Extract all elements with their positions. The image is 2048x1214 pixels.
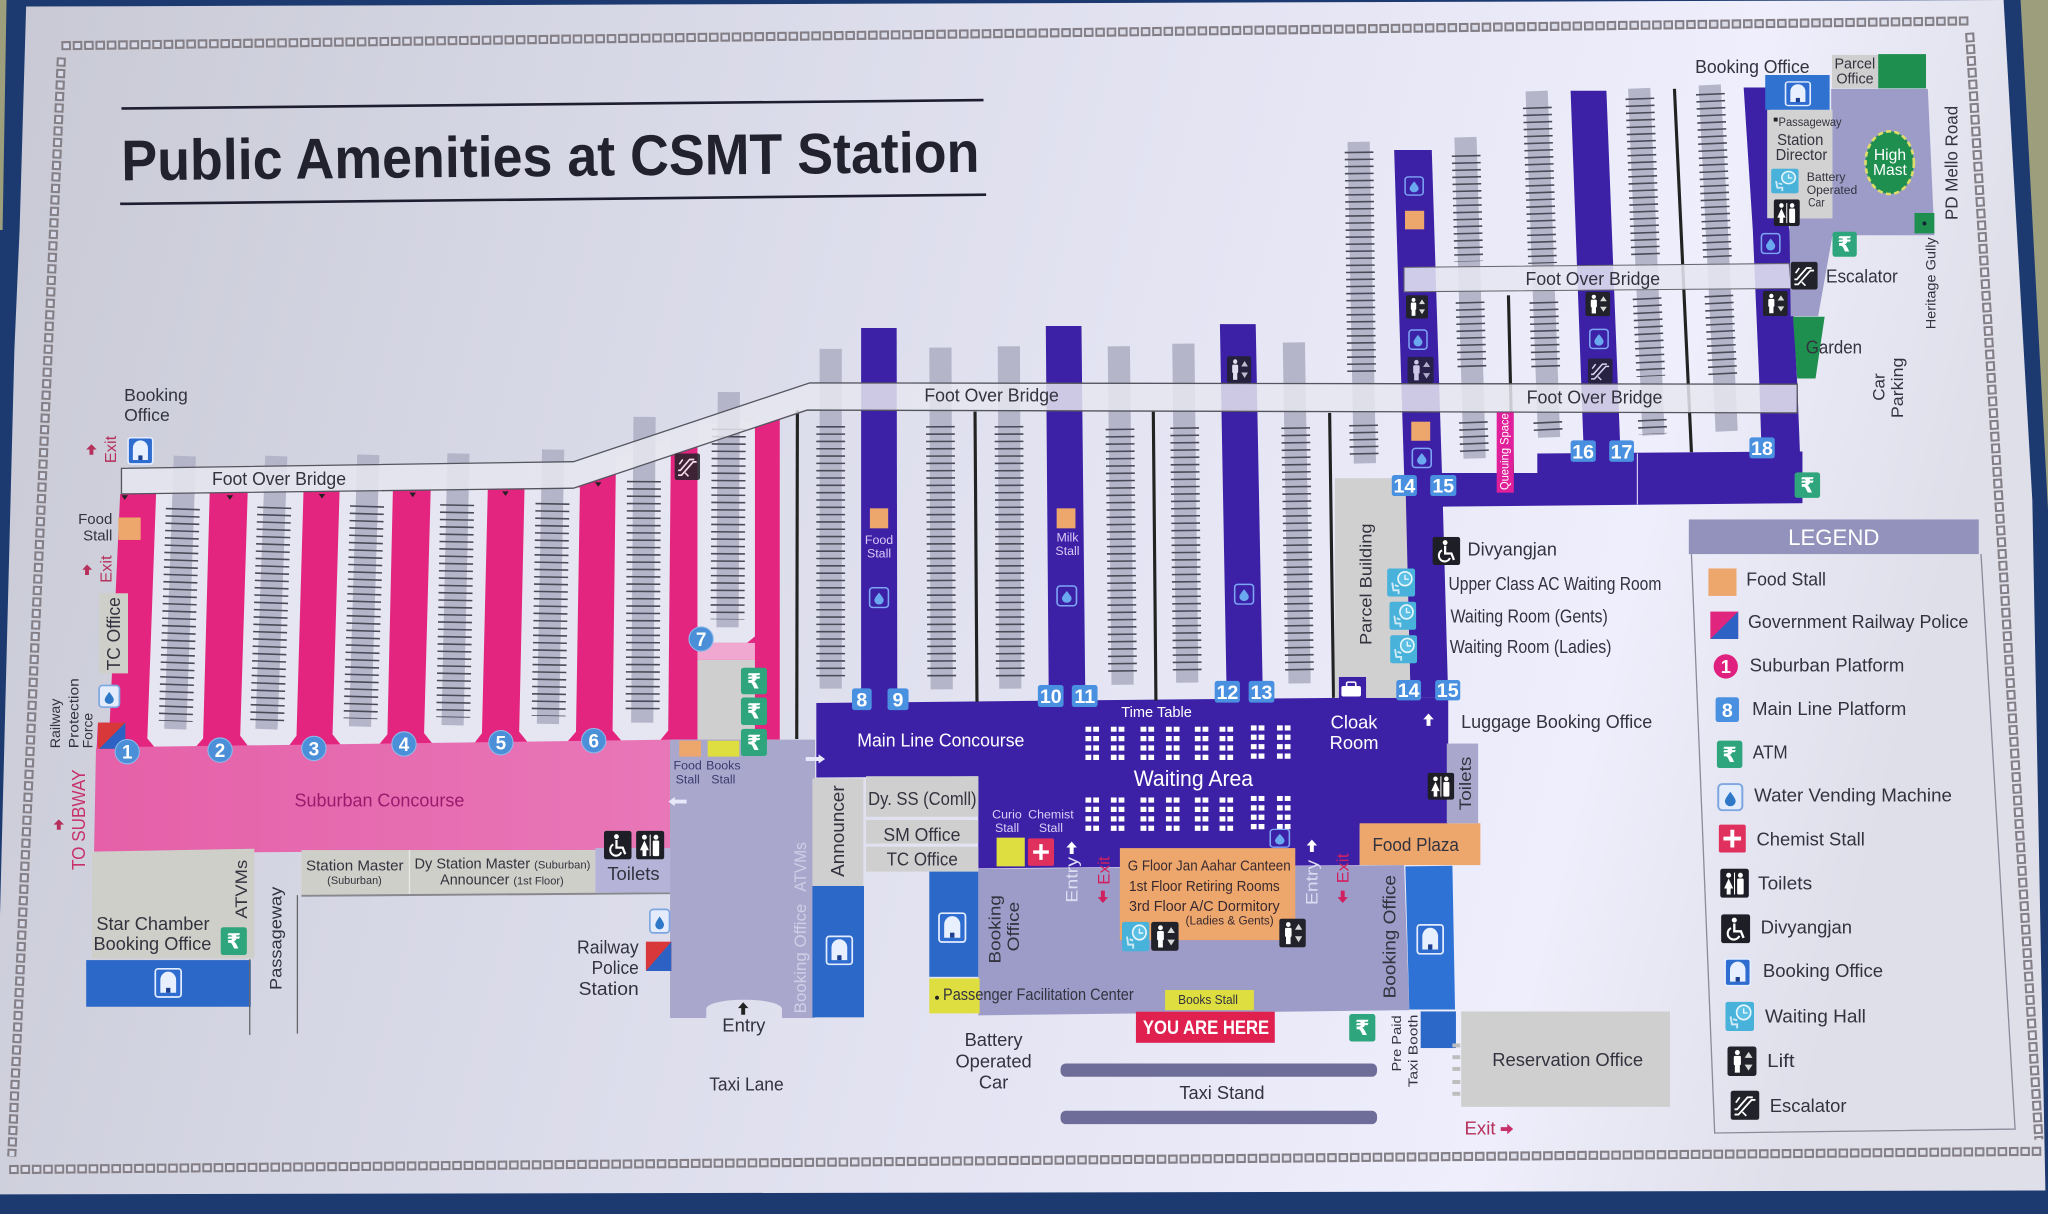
legend: escalator: Escalator	[1770, 1095, 1846, 1116]
legend: suburban platform	[1714, 654, 1904, 679]
legend: atm: ATM	[1753, 741, 1788, 762]
platform numbers: main line: 11	[1074, 686, 1095, 708]
central labels: Operated	[955, 1050, 1032, 1071]
legend: escalator	[1731, 1091, 1846, 1120]
parcel and queuing labels	[1341, 412, 1514, 697]
you are here: YOU ARE HERE	[1143, 1017, 1269, 1039]
platform dividers	[797, 89, 1691, 739]
central labels: ATVMs	[791, 842, 810, 892]
icons: atm: ₹	[227, 931, 241, 954]
legend header	[1689, 519, 1979, 554]
icons: escalators	[675, 262, 1818, 480]
central labels: Announcer	[827, 785, 848, 877]
icons: lifts	[1151, 291, 1788, 951]
waiting room list: Upper Class AC Waiting Room	[1448, 573, 1661, 594]
legend: food stall	[1708, 568, 1826, 596]
lower-left labels: Police	[592, 957, 639, 978]
icons: atm: ₹	[1355, 1017, 1370, 1040]
central labels: Exit	[1334, 853, 1353, 883]
central labels: 1st Floor Retiring Rooms	[1129, 878, 1280, 895]
platform numbers: main line: 15	[1437, 680, 1459, 702]
central labels: Dy. SS (Comll)	[868, 788, 977, 809]
panel: north-east area	[1765, 54, 1934, 378]
icons: water vending	[99, 177, 1780, 933]
platform numbers: main line: 18	[1751, 438, 1773, 460]
legend: waiting hall	[1725, 1002, 1866, 1031]
central labels: Car	[979, 1072, 1008, 1093]
platform numbers: main line: 14	[1393, 476, 1415, 498]
central labels: Booking Office	[791, 904, 810, 1013]
central labels: Curio	[992, 807, 1022, 821]
left side labels: Force	[81, 713, 96, 748]
icons: atm: ₹	[747, 671, 761, 694]
north-east labels: Passageway	[1779, 115, 1842, 129]
icons: atm: ₹	[1800, 475, 1815, 498]
legend: chemist	[1719, 825, 1865, 853]
central labels: SM Office	[883, 824, 960, 845]
central labels: (Ladies & Gents)	[1186, 913, 1274, 927]
platform numbers: main line	[852, 437, 1775, 711]
panel: suburban concourse	[94, 740, 671, 853]
central labels: Taxi Stand	[1179, 1082, 1265, 1103]
central labels: Toilets	[1456, 757, 1475, 810]
parcel and queuing labels: Queuing Space	[1499, 413, 1512, 490]
parcel and queuing labels: Parcel Building	[1356, 523, 1375, 645]
north-east labels: Car	[1808, 196, 1825, 210]
left side labels: TC Office	[103, 597, 124, 670]
legend header: LEGEND	[1788, 525, 1879, 550]
central labels: Waiting Area	[1134, 766, 1254, 791]
left side labels: Exit	[99, 555, 116, 583]
legend: police: Government Railway Police	[1748, 611, 1968, 632]
panel: reservation office	[1452, 1011, 1670, 1107]
platform numbers: main line: 16	[1572, 441, 1594, 463]
platform numbers: main line: 10	[1040, 686, 1062, 708]
legend: main line platform	[1716, 697, 1906, 722]
platform numbers: main line: 8	[856, 689, 867, 711]
central labels: Taxi Booth	[1406, 1015, 1421, 1087]
left side labels: Railway	[48, 698, 63, 748]
legend: booking office: Booking Office	[1763, 960, 1883, 981]
lower-left labels: Entry	[722, 1015, 766, 1036]
lower-left labels: Star Chamber	[96, 913, 210, 934]
platform numbers: main line: 13	[1251, 682, 1272, 704]
platform numbers: main line: 12	[1216, 682, 1238, 704]
left side labels: Booking	[124, 385, 188, 405]
north-east labels: Heritage Gully	[1924, 237, 1939, 329]
central labels: Battery	[965, 1029, 1023, 1050]
platform numbers: suburban: 2	[215, 741, 225, 762]
north-east labels: Garden	[1806, 336, 1862, 357]
high mast	[1866, 131, 1914, 194]
central labels: Exit	[1095, 856, 1114, 885]
legend: divyangjan: Divyangjan	[1761, 917, 1852, 938]
left side labels: Stall	[83, 528, 112, 545]
central labels: G Floor Jan Aahar Canteen	[1128, 858, 1291, 875]
central labels: Stall	[995, 821, 1019, 835]
central labels: Passenger Facilitation Center	[943, 986, 1134, 1004]
north-east labels: Operated	[1807, 183, 1857, 197]
panel: reservation office: Reservation Office	[1492, 1049, 1643, 1070]
platform stall labels: Stall	[1055, 544, 1080, 558]
small stalls at suburban end: Books	[706, 759, 741, 773]
waiting room list: Waiting Room (Gents)	[1450, 606, 1608, 627]
icons: atm: ₹	[1837, 234, 1852, 257]
platform numbers: suburban: 6	[588, 732, 599, 753]
platform stall labels: Food	[865, 533, 893, 547]
high mast: Mast	[1873, 162, 1908, 179]
central labels: TC Office	[887, 849, 958, 870]
icons: booking offices	[128, 82, 1810, 997]
platform stall labels: Milk	[1056, 531, 1079, 545]
icons: atm: ₹	[747, 732, 761, 755]
legend: lift: Lift	[1767, 1050, 1795, 1071]
platform numbers: main line: 9	[893, 689, 904, 711]
legend: police	[1710, 611, 1968, 639]
small stalls at suburban end: Stall	[676, 772, 700, 786]
panel: entry block	[670, 740, 815, 1018]
central labels: Booking Office	[1379, 875, 1399, 998]
tracks: main line	[831, 342, 1300, 689]
left side labels: Food	[78, 511, 112, 528]
tracks: upper main line	[1359, 85, 1727, 463]
legend: water: Water Vending Machine	[1754, 784, 1952, 805]
central labels: Room	[1330, 732, 1378, 753]
lower-left labels: ATVMs	[232, 860, 251, 919]
legend: booking office	[1725, 959, 1883, 986]
left side labels: Protection	[66, 678, 81, 748]
lower-left labels: Toilets	[607, 863, 660, 884]
legend: chemist: Chemist Stall	[1756, 828, 1865, 849]
platform numbers: suburban: 3	[309, 739, 319, 760]
central labels: Main Line Concourse	[857, 730, 1024, 751]
bridge labels: Foot Over Bridge	[212, 468, 346, 489]
north-east labels: Station	[1777, 132, 1823, 149]
waiting room list: Divyangjan	[1468, 538, 1557, 559]
north-east labels: Director	[1776, 147, 1827, 164]
bridge labels: Foot Over Bridge	[1527, 386, 1662, 407]
legend: toilets	[1720, 869, 1812, 898]
central labels: Entry	[1302, 859, 1321, 905]
north-east labels: Parcel	[1834, 56, 1875, 72]
left side labels: Office	[124, 405, 170, 425]
platform stall labels: Stall	[867, 546, 891, 560]
icons: waiting rooms	[1122, 169, 1799, 951]
legend: suburban platform: 1	[1721, 656, 1731, 677]
central labels: Office	[1004, 902, 1023, 951]
lower-left labels: Railway	[577, 936, 640, 957]
legend: lift	[1727, 1046, 1795, 1076]
north-east labels: Car	[1869, 373, 1888, 401]
central labels: Food Plaza	[1372, 834, 1460, 855]
legend: waiting hall: Waiting Hall	[1765, 1006, 1866, 1027]
north-east labels: Office	[1836, 71, 1874, 87]
bridge labels	[212, 268, 1662, 489]
central labels: Exit	[1465, 1117, 1496, 1138]
central labels: Time Table	[1121, 705, 1192, 721]
central labels: Pre Paid	[1389, 1015, 1404, 1072]
platform numbers: suburban: 4	[399, 735, 410, 756]
panel: legend	[1689, 519, 2015, 1133]
icons: atm: ₹	[747, 701, 761, 724]
panel: central booking hall	[929, 744, 1480, 1048]
north-east labels: Escalator	[1826, 265, 1898, 286]
panel: seating	[1085, 725, 1291, 831]
platform numbers: main line: 17	[1611, 441, 1633, 463]
title: Public Amenities at CSMT Station	[121, 121, 980, 193]
platform stall labels	[865, 211, 1430, 560]
lower-left labels: Station Master	[306, 859, 404, 875]
lower-left labels: Station	[579, 978, 639, 999]
waiting room list	[1448, 538, 1661, 732]
platform numbers: main line: 15	[1432, 476, 1454, 498]
lower-left labels: Taxi Lane	[709, 1074, 784, 1095]
small stalls at suburban end: Stall	[711, 772, 735, 786]
platform numbers: suburban: 7	[696, 630, 706, 651]
platform numbers: suburban: 1	[122, 743, 132, 764]
tracks: suburban	[175, 392, 729, 729]
bridge labels: Foot Over Bridge	[1526, 268, 1660, 289]
central labels: Booking	[985, 895, 1004, 963]
legend: divyangjan	[1721, 914, 1852, 943]
legend: atm	[1717, 741, 1788, 768]
taxi stand bars	[1061, 1063, 1377, 1124]
north-east labels: PD Mello Road	[1941, 106, 1961, 220]
foot over bridge upper	[1404, 263, 1791, 292]
central labels: 3rd Floor A/C Dormitory	[1129, 898, 1280, 915]
legend: toilets: Toilets	[1758, 872, 1812, 893]
central labels: Cloak	[1331, 711, 1378, 732]
title	[120, 100, 986, 204]
legend: food stall: Food Stall	[1746, 568, 1826, 589]
left side labels: Suburban Concourse	[295, 789, 464, 810]
you are here	[1136, 1012, 1275, 1043]
panel: offices centre	[812, 776, 978, 1017]
legend: main line platform: 8	[1722, 700, 1733, 722]
central labels: Entry	[1063, 856, 1082, 903]
lower-left labels: Announcer (1st Floor)	[440, 873, 564, 889]
central labels: Stall	[1039, 821, 1063, 835]
central labels: Chemist	[1028, 807, 1074, 821]
platform numbers: suburban: 5	[496, 734, 506, 755]
high mast: High	[1874, 147, 1906, 164]
legend: suburban platform: Suburban Platform	[1750, 654, 1904, 675]
lower-left labels	[94, 856, 784, 1095]
lower-left labels: (Suburban)	[327, 875, 382, 887]
small stalls at suburban end	[668, 741, 825, 806]
legend: atm: ₹	[1722, 744, 1737, 767]
north-east labels: Battery	[1807, 170, 1846, 184]
platform numbers: suburban	[115, 627, 713, 764]
lower-left labels: Booking Office	[94, 933, 211, 954]
panel: suburban platforms	[97, 409, 807, 749]
small stalls at suburban end: Food	[674, 759, 702, 773]
central labels: Books Stall	[1178, 992, 1238, 1007]
icons: toilets and divyangjan	[604, 199, 1800, 859]
north-east labels	[1695, 56, 1961, 418]
legend: main line platform: Main Line Platform	[1752, 698, 1906, 719]
bridge labels: Foot Over Bridge	[924, 385, 1059, 406]
left side labels: TO SUBWAY	[68, 769, 89, 870]
north-east labels: Booking Office	[1695, 56, 1810, 77]
panel: left annex buildings	[86, 848, 670, 1035]
panel: parcel building	[1335, 478, 1411, 698]
left side labels: Exit	[103, 435, 120, 463]
platform numbers: main line: 14	[1398, 680, 1420, 702]
waiting room list: Waiting Room (Ladies)	[1450, 636, 1611, 657]
lower-left labels: Passageway	[266, 886, 285, 990]
north-east labels: Parking	[1888, 358, 1907, 418]
legend: water	[1718, 784, 1952, 810]
legend frame	[1691, 554, 2015, 1133]
panel: main line platforms	[816, 88, 1802, 868]
icons: atm	[221, 232, 1857, 1042]
lower-left labels: Dy Station Master (Suburban)	[415, 856, 590, 872]
foot over bridge lower-left and main	[121, 383, 1797, 494]
central labels	[791, 705, 1513, 1138]
waiting room list: Luggage Booking Office	[1461, 711, 1652, 732]
left side labels	[48, 385, 464, 870]
